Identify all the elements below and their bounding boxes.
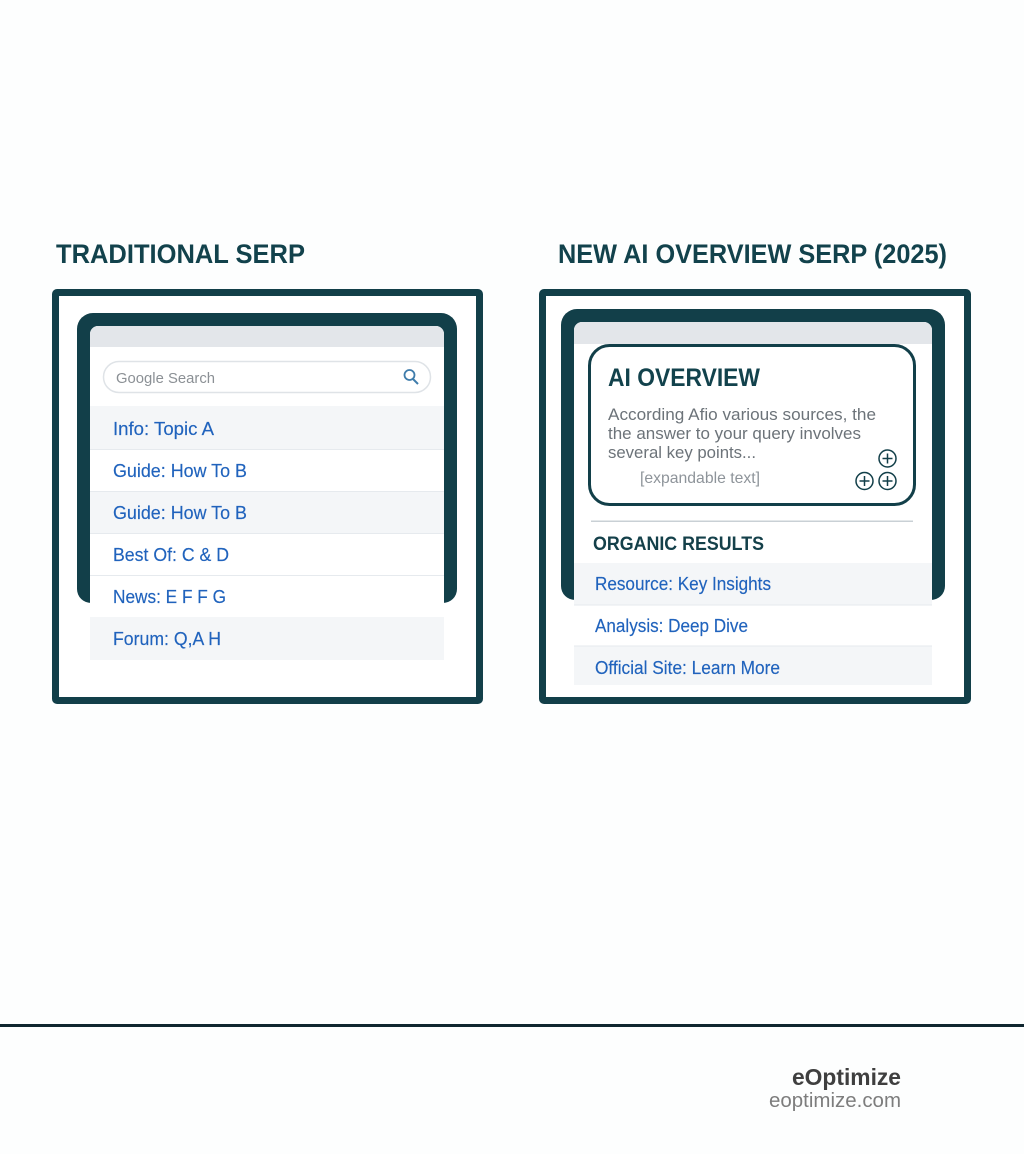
organic results heading: ORGANIC RESULTS [593,534,764,555]
result row: Analysis [574,604,932,646]
result row: Info [90,406,444,449]
result row: Forum [90,617,444,660]
AI overview body text: According Afio various sources, the [608,405,876,424]
result row: Resource [574,563,932,605]
divider [591,520,913,522]
callout: AI overview box [590,346,914,504]
result row: Guide [90,449,444,491]
expandable text label: [expandable text] [640,470,760,487]
result row: News: News: E F F G [113,587,226,607]
footer brand: eoptimize.com [769,1090,901,1112]
AI overview body text: several key points... [608,443,756,462]
search bar [104,362,430,392]
panel frame [56,292,480,700]
result row: Resource: Resource: Key Insights [595,574,771,594]
result row: Info: Info: Topic A [113,419,214,439]
result row: Forum: Forum: Q,A H [113,629,221,649]
panel: traditional SERP [56,292,480,700]
phone screen [574,322,932,685]
result row: Guide 2: Guide: How To B [113,503,247,523]
AI overview body text: the answer to your query involves [608,424,861,443]
result row: Official Site [574,646,932,685]
result row: Best Of [90,533,444,575]
result row: Analysis: Analysis: Deep Dive [595,616,748,636]
heading: traditional SERP: TRADITIONAL SERP [56,239,305,269]
result row: Guide: Guide: How To B [113,461,247,481]
panel frame [542,292,968,700]
AI overview heading: AI OVERVIEW [608,364,760,392]
search bar: Google Search [116,370,215,387]
phone body [561,309,945,600]
footer brand: eOptimize [792,1064,901,1090]
phone screen [90,326,444,660]
result row: Official Site: Official Site: Learn More [595,658,780,678]
result row: News [90,575,444,617]
phone body [77,313,457,603]
heading: AI overview SERP: NEW AI OVERVIEW SERP (2025) [558,239,947,269]
result row: Guide 2 [90,491,444,533]
panel: AI overview SERP [542,292,968,700]
AI overview body text [608,405,876,462]
icon: plus buttons [856,450,896,490]
footer rule [0,1024,1024,1027]
footer brand [769,1064,901,1112]
result row: Best Of: Best Of: C & D [113,545,229,565]
